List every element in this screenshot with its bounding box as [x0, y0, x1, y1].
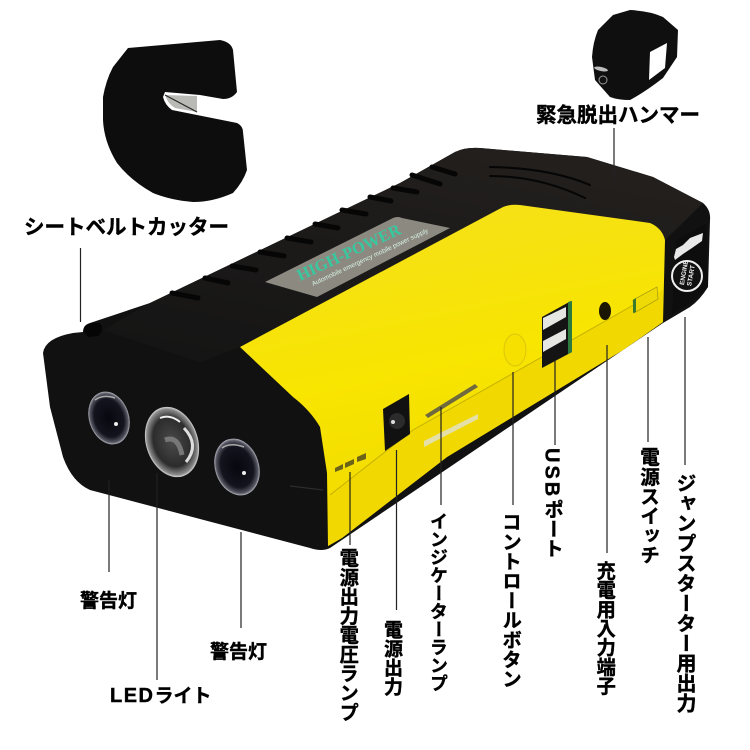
- label plate: Automobile emergency mobile power supply: [311, 227, 430, 288]
- label: seatbelt cutter: シートベルトカッター: [24, 216, 229, 239]
- jump starter device: [43, 148, 710, 550]
- label: left warning light: 警告灯: [80, 591, 137, 612]
- label plate: [265, 217, 450, 297]
- indicator lamp slot: [425, 384, 478, 418]
- white printed bar: [424, 414, 478, 447]
- icon: right warning light: [207, 433, 267, 501]
- label: LED light: LEDライト: [110, 685, 212, 707]
- icon: center LED light: [136, 400, 208, 484]
- label: jump starter output: ジャンプスターター用出力: [673, 473, 695, 713]
- power switch: [633, 287, 658, 313]
- leader lines: [80, 128, 685, 680]
- end cap seam: [290, 486, 323, 490]
- yellow body: [240, 205, 665, 546]
- ribs: [172, 167, 590, 298]
- charging input port: [599, 302, 611, 320]
- black body: [43, 148, 710, 550]
- label: power switch: 電源スイッチ: [637, 447, 659, 565]
- label: emergency hammer: 緊急脱出ハンマー: [536, 104, 700, 127]
- start panel with car and engine start: [672, 224, 708, 314]
- notch: [84, 323, 102, 337]
- label: USB port: USB ポート: [540, 448, 562, 558]
- voltage lamps: [335, 453, 366, 472]
- icon: emergency hammer close-up: [592, 10, 678, 100]
- yellow seam: [330, 303, 637, 495]
- label: control button: コントロールボタン: [499, 512, 521, 688]
- control button: [504, 334, 526, 366]
- label: output voltage lamp: 電源出力電圧ランプ: [336, 548, 357, 722]
- start panel with car and engine start: START: [686, 265, 697, 287]
- icon: left warning light: [82, 386, 136, 450]
- label: right warning light: 警告灯: [210, 642, 267, 663]
- label: charging input: 充電用入力端子: [593, 561, 614, 695]
- label: power output: 電源出力: [381, 620, 402, 696]
- DC output port: [383, 394, 410, 451]
- USB ports: [542, 301, 572, 368]
- lower yellow band: [328, 290, 663, 546]
- top face sheen: [103, 148, 703, 362]
- label plate: HIGH-POWER: [294, 219, 405, 285]
- label: indicator lamp: インジケーターランプ: [428, 512, 448, 692]
- start panel with car and engine start: ENGINE: [679, 259, 690, 286]
- icon: seatbelt cutter close-up: [103, 40, 247, 202]
